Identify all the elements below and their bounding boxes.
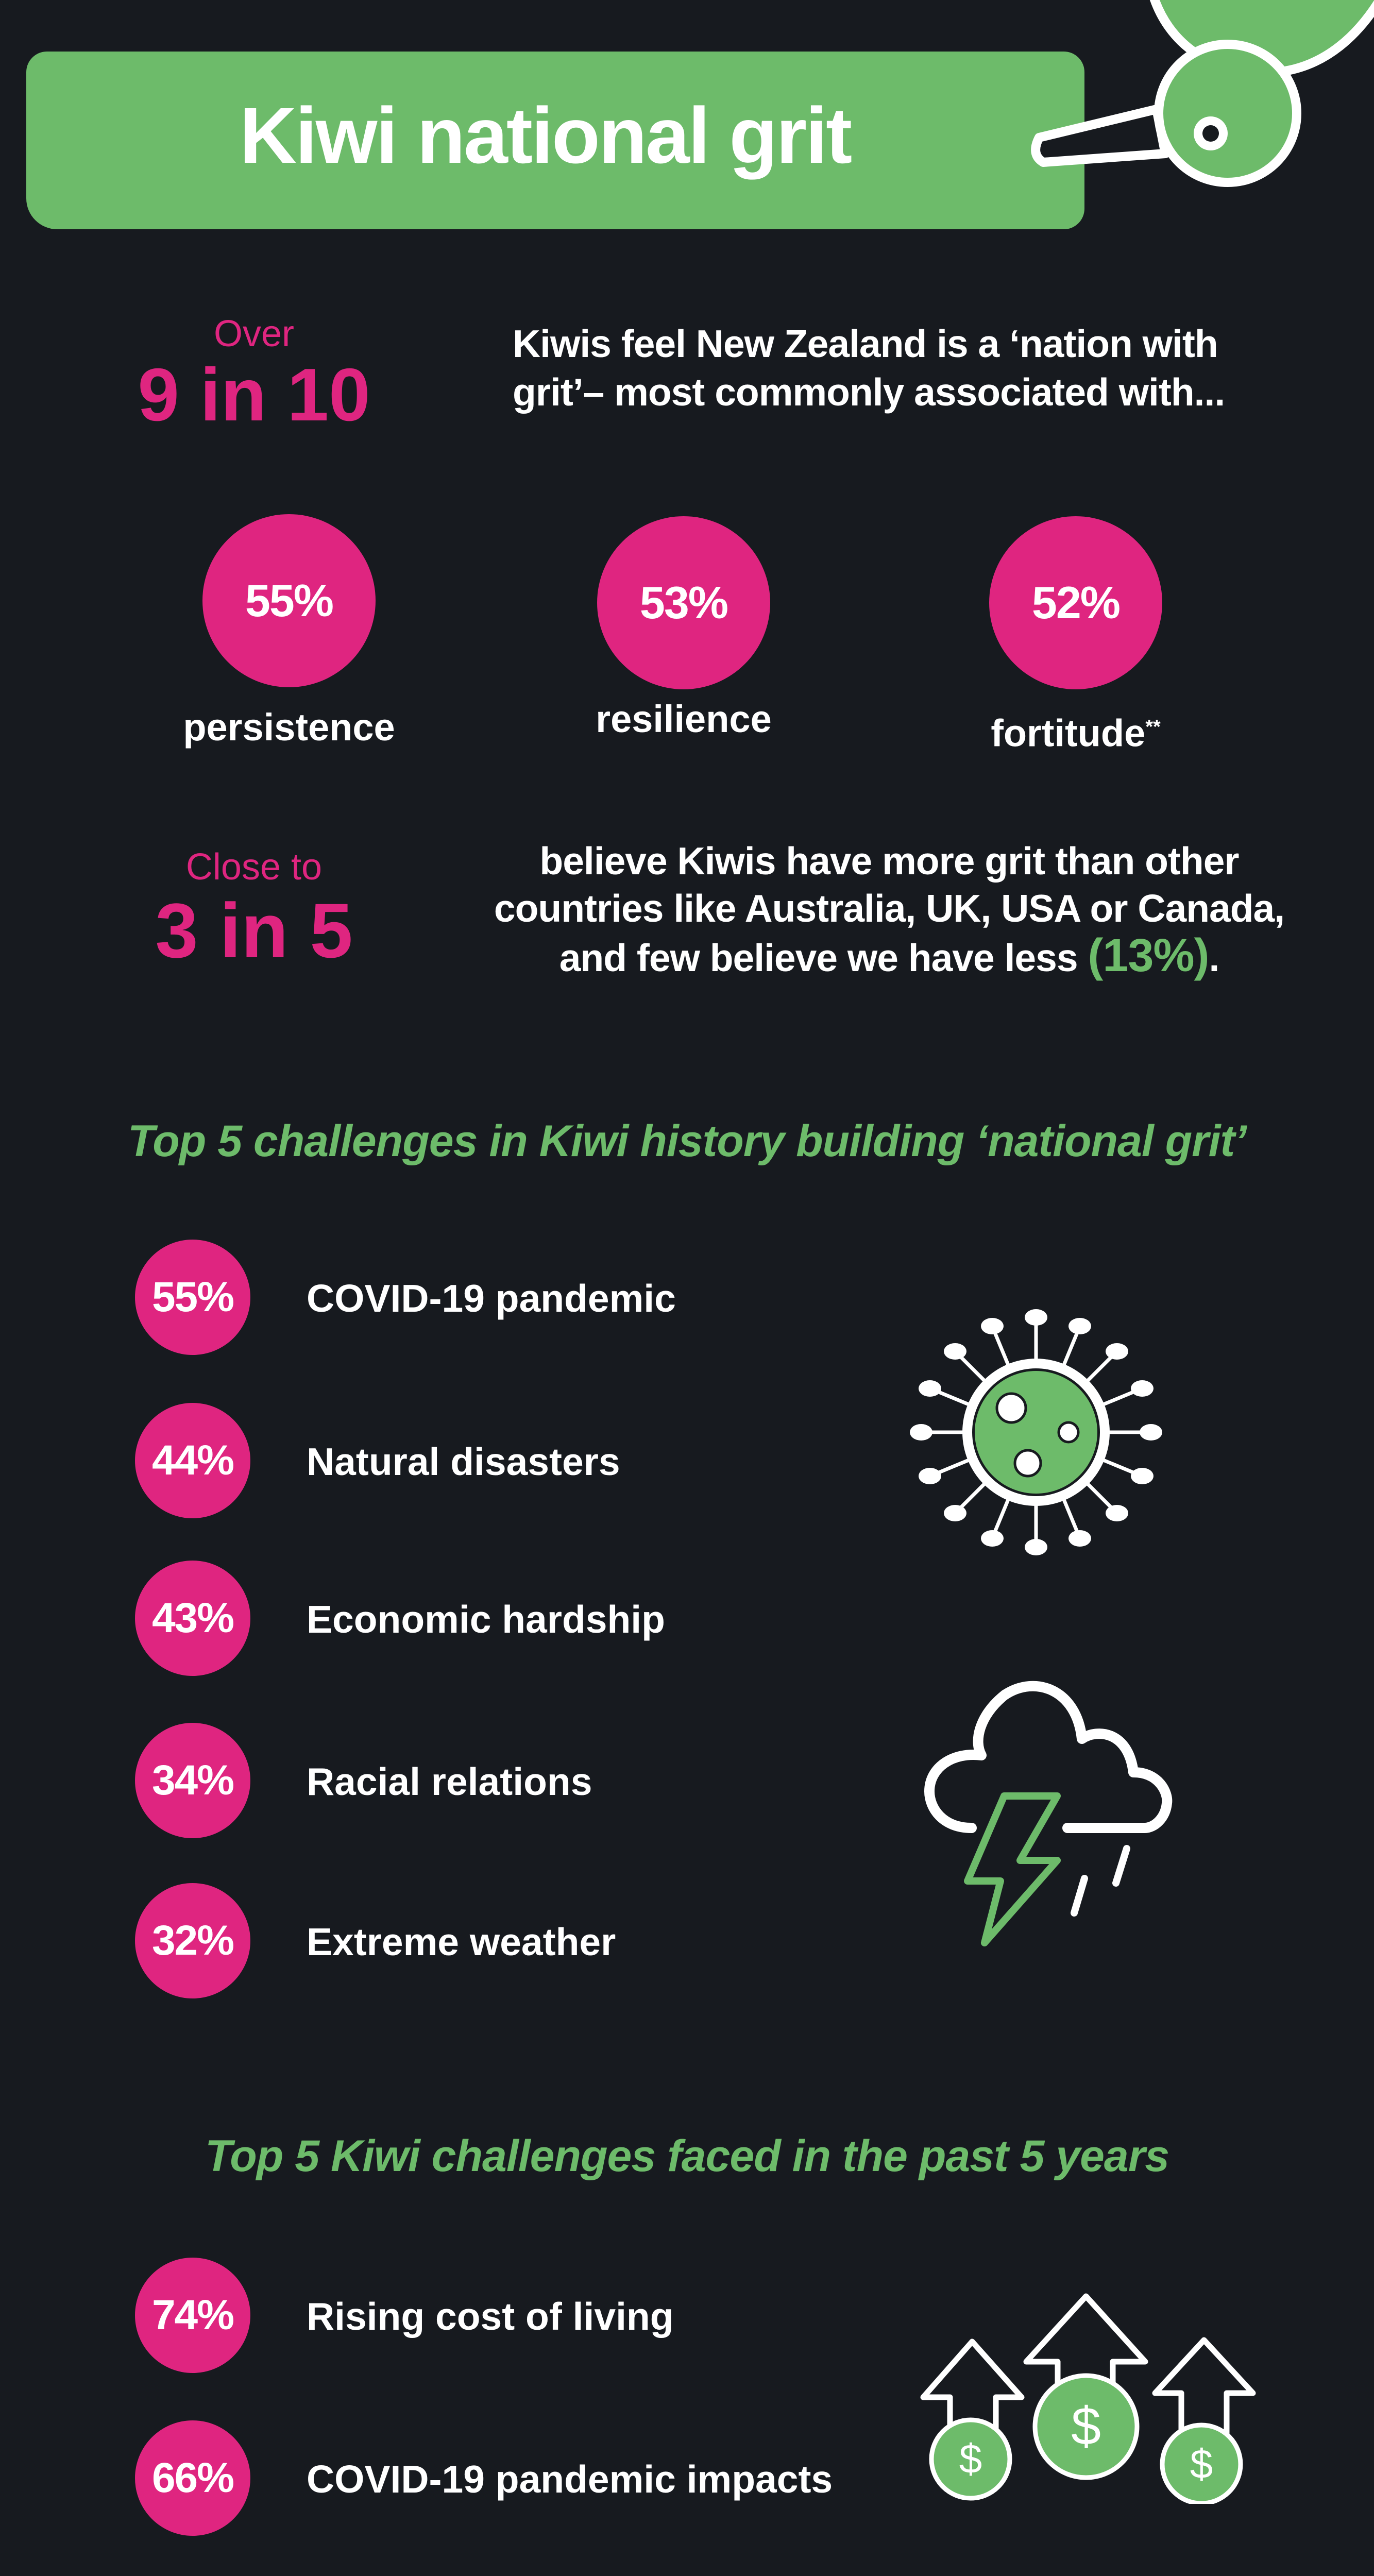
circle: 53% resilience: resilience (596, 698, 772, 740)
circle: 55% persistence: 55% (245, 575, 333, 626)
stat: close to 3 in 5: 3 in 5 (155, 887, 353, 974)
circle: 53% resilience (596, 516, 772, 740)
item: 34% racial relations: Racial relations (307, 1760, 592, 1803)
item: 43% economic hardship (135, 1561, 665, 1676)
icon: money arrows: $ (1071, 2397, 1101, 2456)
item: 32% extreme weather (135, 1883, 616, 1998)
text: nation with grit: grit’– most commonly associated with... (513, 370, 1225, 414)
icon: money arrows: $ (1190, 2441, 1213, 2487)
text: more grit than other countries: countries like Australia, UK, USA or Canada, (494, 887, 1284, 930)
list: history challenges (135, 1240, 676, 1998)
item: 44% natural disasters: 44% (152, 1437, 233, 1484)
circle: 55% persistence: persistence (183, 706, 395, 749)
item: 74% cost of living: 74% (152, 2292, 233, 2338)
heading: top 5 challenges past 5 years: Top 5 Kiwi challenges faced in the past 5 years (205, 2131, 1169, 2181)
item: 66% covid impacts: 66% (152, 2454, 233, 2501)
item: 43% economic hardship: Economic hardship (307, 1598, 665, 1641)
stat: over 9 in 10 (138, 313, 370, 436)
icon: money arrows: $ (959, 2436, 982, 2482)
circle: 52% fortitude (989, 516, 1162, 755)
stat: close to 3 in 5 (155, 846, 353, 974)
icon: money arrows (920, 2294, 1256, 2504)
item: 66% covid impacts: COVID-19 pandemic impacts (307, 2458, 833, 2501)
item: 32% extreme weather: 32% (152, 1917, 233, 1964)
item: 43% economic hardship: 43% (152, 1595, 233, 1641)
item: 55% COVID-19: 55% (152, 1274, 233, 1320)
circle: 55% persistence (183, 514, 395, 749)
item: 74% cost of living (135, 2258, 674, 2373)
heading: top 5 challenges in Kiwi history: Top 5 challenges in Kiwi history building ‘national grit’ (128, 1116, 1246, 1166)
item: 44% natural disasters: Natural disasters (307, 1440, 620, 1483)
text: nation with grit (513, 322, 1225, 414)
text: more grit than other countries (494, 839, 1284, 981)
item: 34% racial relations (135, 1723, 592, 1838)
text: more grit than other countries: and few believe we have less (13%). (559, 930, 1219, 981)
text: more grit than other countries: believe Kiwis have more grit than other (539, 839, 1239, 883)
item: 32% extreme weather: Extreme weather (307, 1920, 616, 1963)
stat: over 9 in 10: Over (214, 313, 294, 354)
item: 55% COVID-19 (135, 1240, 676, 1355)
item: 66% covid impacts (135, 2420, 833, 2536)
item: 34% racial relations: 34% (152, 1757, 233, 1804)
icon: virus (910, 1309, 1162, 1555)
circle: 53% resilience: 53% (640, 577, 727, 628)
text: nation with grit: Kiwis feel New Zealand is a ‘nation with (513, 322, 1218, 365)
item: 74% cost of living: Rising cost of living (307, 2295, 674, 2338)
circle: 52% fortitude: 52% (1032, 577, 1119, 628)
circle: 52% fortitude: fortitude** (991, 712, 1161, 755)
item: 55% COVID-19: COVID-19 pandemic (307, 1277, 676, 1320)
icon: kiwi bird (1031, 0, 1374, 187)
title banner (26, 52, 1084, 229)
title text: Kiwi national grit (240, 91, 851, 180)
icon: storm cloud (924, 1681, 1173, 1946)
item: 44% natural disasters (135, 1403, 620, 1518)
stat: close to 3 in 5: Close to (186, 846, 322, 888)
stat: over 9 in 10: 9 in 10 (138, 353, 370, 436)
list: recent challenges (135, 2258, 833, 2536)
